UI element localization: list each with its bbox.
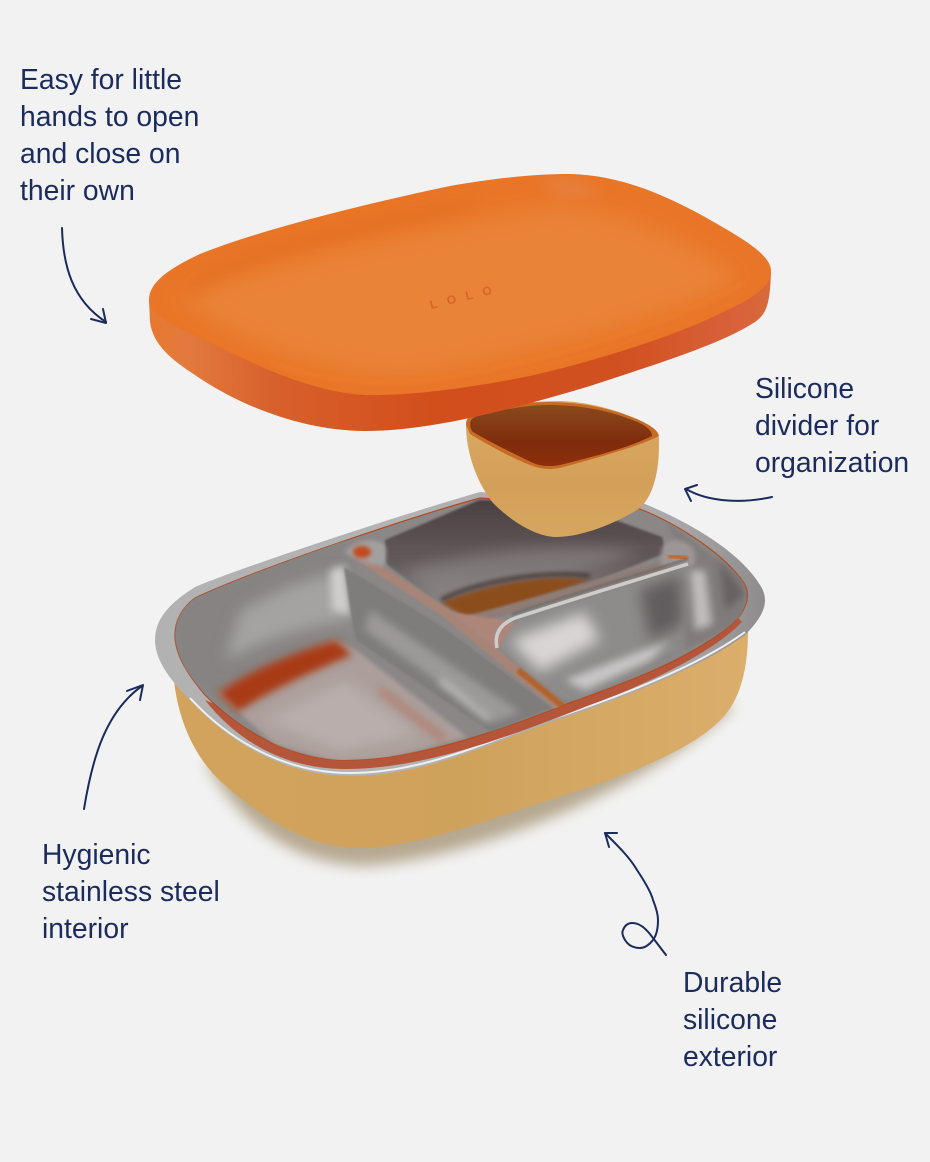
lid logo: LOLO: [428, 281, 503, 312]
text: easy to open: hands to open: [20, 100, 199, 132]
text: silicone exterior: Durable: [683, 966, 782, 998]
text: stainless steel: interior: [42, 912, 128, 944]
icon: silicone divider cup: [466, 401, 659, 537]
text: silicone divider: [755, 372, 909, 478]
text: silicone divider: organization: [755, 446, 909, 478]
text: silicone exterior: exterior: [683, 1040, 777, 1072]
text: easy to open: Easy for little: [20, 63, 182, 95]
text: stainless steel: [42, 838, 220, 944]
arrow: to divider: [685, 485, 772, 501]
text: easy to open: and close on: [20, 137, 180, 169]
text: silicone exterior: [683, 966, 782, 1072]
arrow: to lid: [62, 228, 106, 323]
text: easy to open: their own: [20, 174, 135, 206]
arrow: to steel interior: [84, 685, 143, 809]
text: stainless steel: Hygienic: [42, 838, 151, 870]
text: silicone divider: divider for: [755, 409, 879, 441]
icon: steel compartments: [175, 500, 745, 762]
text: easy to open: [20, 63, 199, 206]
text: stainless steel: stainless steel: [42, 875, 220, 907]
icon: lunch box base: [155, 492, 765, 866]
text: silicone exterior: silicone: [683, 1003, 777, 1035]
arrow: to silicone exterior: [605, 833, 666, 955]
icon: orange lid: [149, 174, 771, 431]
text: silicone divider: Silicone: [755, 372, 854, 404]
